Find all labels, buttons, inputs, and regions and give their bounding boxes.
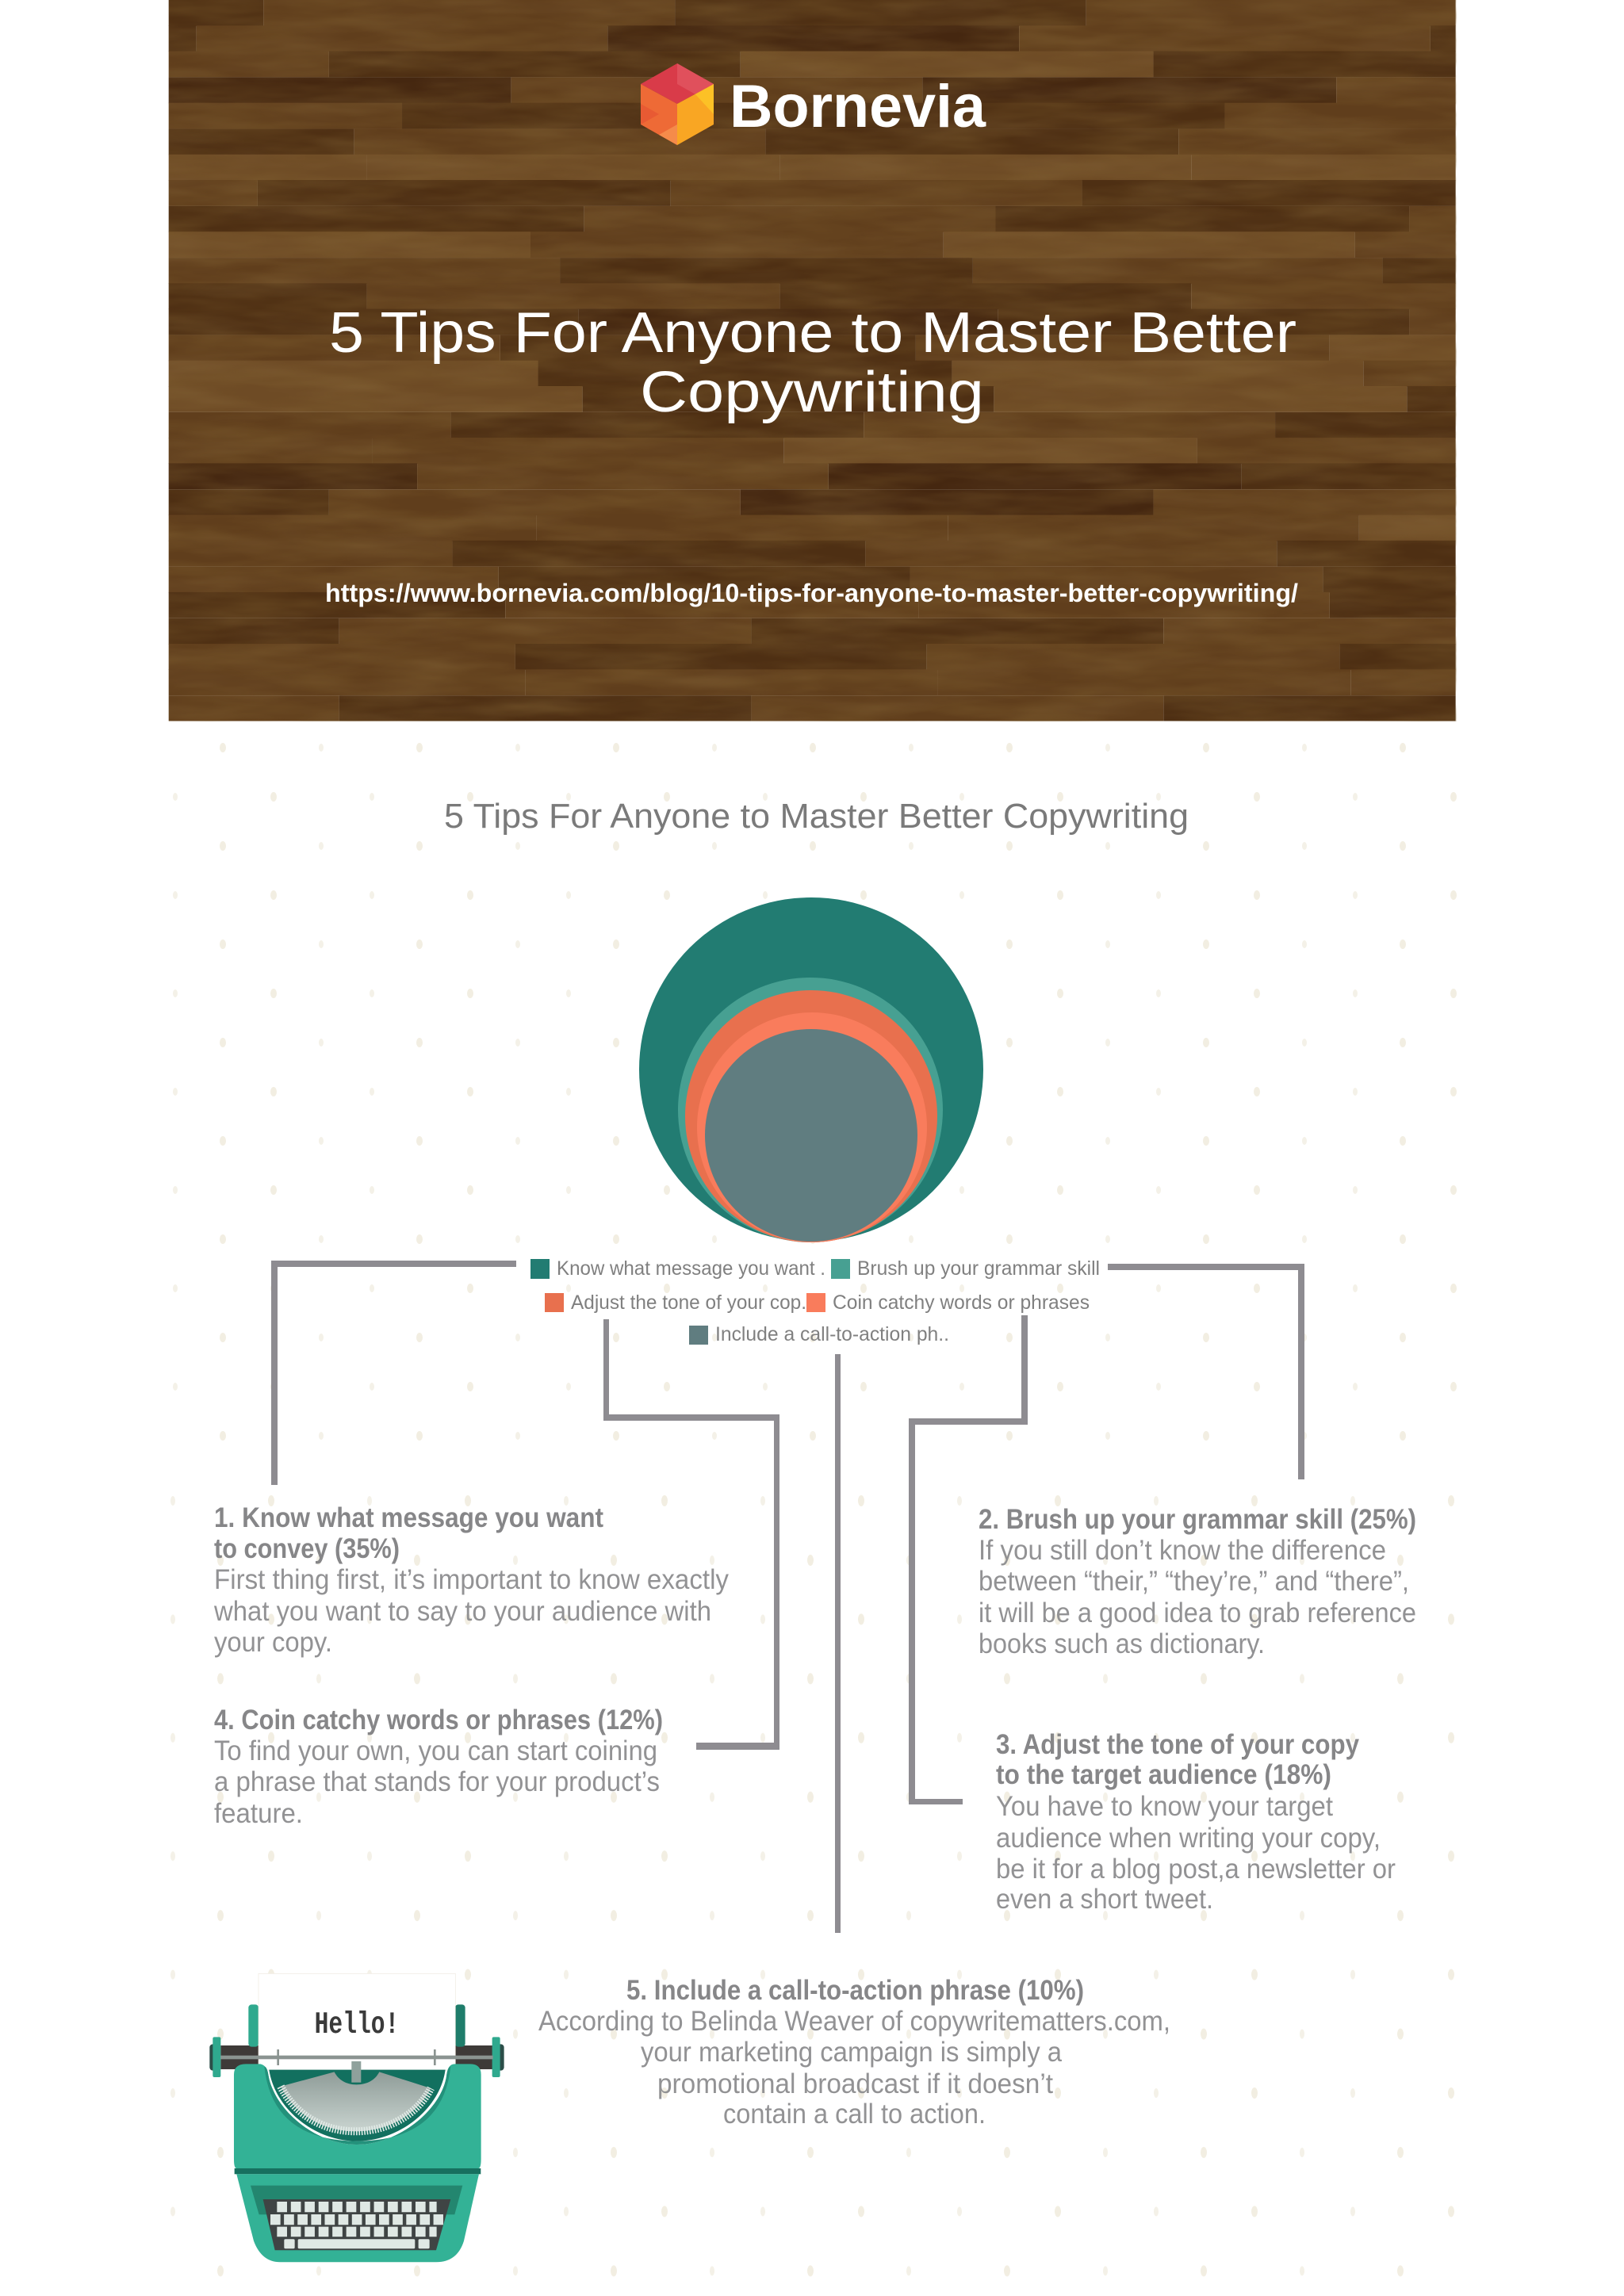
text block: tip 3: even a short tweet.	[996, 1884, 1213, 1915]
text block: tip 5: contain a call to action.	[723, 2099, 986, 2130]
connector: tip 4	[603, 1319, 779, 1750]
text block: tip 2: If you still don’t know the difference	[979, 1535, 1386, 1566]
text block: tip 5: your marketing campaign is simply a	[641, 2037, 1062, 2068]
chart legend: Coin catchy words or phrases	[833, 1292, 1090, 1314]
text block: tip 1: your copy.	[214, 1627, 332, 1658]
chart legend: Brush up your grammar skill	[857, 1257, 1100, 1280]
text block: tip 3: audience when writing your copy,	[996, 1823, 1381, 1854]
wood plank background	[169, 0, 1457, 721]
paper text: Hello!	[315, 2007, 399, 2042]
title: 5 Tips For Anyone to Master Better	[329, 301, 1297, 365]
panel: wood header	[169, 0, 1457, 721]
text block: tip 4: To find your own, you can start coining	[214, 1735, 657, 1766]
icon: typewriter	[209, 1973, 504, 2262]
chart legend	[530, 1257, 1100, 1345]
text block: tip 5: According to Belinda Weaver of copywritematters.com,	[538, 2006, 1170, 2037]
text block: tip 3: be it for a blog post,a newsletter or	[996, 1854, 1396, 1885]
logo wordmark: Bornevia	[730, 73, 986, 140]
connector: tip 2	[1108, 1264, 1304, 1479]
text block: tip 4: a phrase that stands for your product’s	[214, 1766, 660, 1797]
text block: tip 1: to convey (35%)	[214, 1533, 400, 1564]
title	[329, 301, 1297, 424]
text block: tip 1: First thing first, it’s important to know exactly	[214, 1564, 729, 1595]
text block: tip 3	[996, 1729, 1396, 1915]
nested circle chart	[639, 897, 983, 1242]
text block: tip 4: 4. Coin catchy words or phrases (12%)	[214, 1705, 663, 1735]
chart legend: Know what message you want .	[557, 1257, 825, 1280]
connector: tip 5	[835, 1354, 841, 1933]
connector: tip 1	[271, 1261, 516, 1485]
text block: tip 2: between “their,” “they’re,” and “there”,	[979, 1566, 1409, 1597]
text block: tip 4	[214, 1705, 663, 1829]
text block: tip 3: to the target audience (18%)	[996, 1759, 1331, 1790]
text block: tip 1: 1. Know what message you want	[214, 1502, 603, 1533]
text block: tip 4: feature.	[214, 1798, 303, 1829]
text block: tip 3: You have to know your target	[996, 1791, 1333, 1822]
source URL: https://www.bornevia.com/blog/10-tips-for-anyone-to-master-better-copywriting/	[325, 579, 1298, 607]
text block: tip 5: promotional broadcast if it doesn’t	[657, 2068, 1053, 2099]
text block: tip 2: books such as dictionary.	[979, 1628, 1265, 1659]
text block: tip 5: 5. Include a call-to-action phrase (10%)	[626, 1975, 1084, 2006]
title: Copywriting	[640, 361, 984, 424]
background dot pattern	[169, 723, 1457, 2296]
connector: tip 3	[909, 1315, 1028, 1804]
text block: tip 5	[538, 1975, 1170, 2130]
text block: tip 1	[213, 1502, 729, 1658]
chart legend: Include a call-to-action ph..	[715, 1323, 949, 1345]
icon: hexagon logo mark	[641, 63, 714, 145]
text block: tip 2: it will be a good idea to grab reference	[979, 1598, 1416, 1628]
text block: tip 1: what you want to say to your audience with	[213, 1596, 711, 1627]
logo: Bornevia	[641, 63, 986, 145]
text block: tip 2: 2. Brush up your grammar skill (25%)	[979, 1504, 1416, 1535]
text block: tip 3: 3. Adjust the tone of your copy	[996, 1729, 1359, 1760]
chart legend: Adjust the tone of your cop.	[571, 1292, 806, 1314]
text block: tip 2	[979, 1504, 1416, 1659]
chart title: 5 Tips For Anyone to Master Better Copywriting	[444, 797, 1189, 836]
